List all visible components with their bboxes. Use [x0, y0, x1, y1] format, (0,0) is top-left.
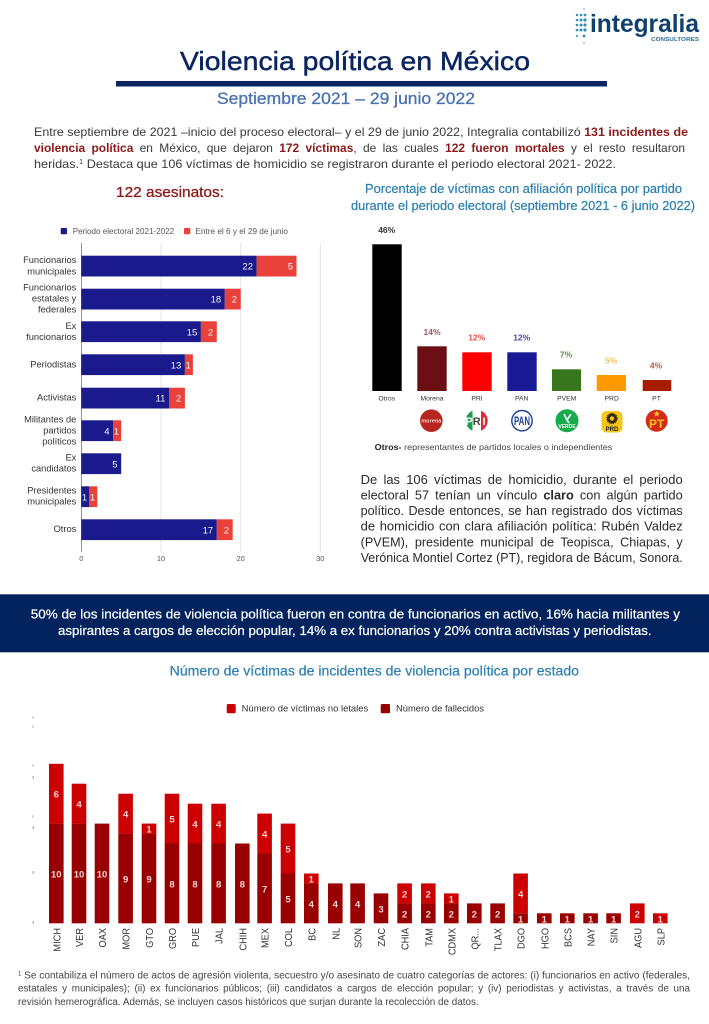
value labels: 2: [402, 909, 407, 920]
paragraph: victims with party link: electoral 57 tenían un vínculo claro con algún partido: [361, 488, 683, 502]
state labels: MICH: [52, 928, 63, 952]
value labels: 1: [186, 360, 191, 371]
category labels: políticos: [42, 437, 77, 447]
value labels: 4: [192, 820, 198, 831]
bar chart: assassinations by category: [23, 226, 324, 563]
state labels: QR...: [470, 928, 481, 950]
value labels: 5: [169, 815, 175, 826]
note: Otros: Otros- representantes de partidos locales o independientes: [375, 442, 612, 452]
value labels: 2: [449, 909, 454, 920]
percentages: 5%: [605, 355, 618, 365]
logo: integralia: [576, 8, 700, 44]
value labels: 2: [635, 909, 640, 920]
value labels: 8: [192, 879, 198, 890]
footnote: estatales y municipales); (ii) ex funcionarios públicos; (iii) candidatos a cargos de elección popular; y (iv) periodistas y activistas, a través de una: [18, 984, 690, 995]
icon: Verde logo: [556, 409, 578, 432]
value labels: 1: [146, 825, 152, 836]
percentages: 14%: [423, 327, 441, 337]
party names: [378, 396, 661, 403]
heading: party affiliation chart: durante el periodo electoral (septiembre 2021 - 6 junio 2022): [351, 199, 695, 213]
value labels: 10: [74, 870, 84, 880]
state labels: DGO: [516, 928, 528, 949]
value labels: 5: [285, 894, 291, 905]
icon: PRD logo: PRD: [606, 427, 619, 433]
category labels: Presidentes: [27, 486, 77, 496]
value labels: 13: [171, 360, 181, 371]
state labels: BCS: [563, 928, 574, 947]
value labels: 1: [588, 914, 594, 925]
state labels: VER: [75, 928, 86, 947]
state labels: NL: [331, 928, 342, 940]
value labels: 2: [426, 889, 431, 900]
value labels: 1: [90, 492, 95, 503]
banner: incident shares: 50% de los incidentes de violencia política fueron en contra de funcionarios en activo, 16% hacia militantes y: [31, 607, 681, 621]
value labels: 5: [288, 262, 293, 273]
state labels: HGO: [540, 928, 551, 949]
percentages: 12%: [513, 333, 531, 343]
value labels: 10: [51, 870, 62, 880]
value labels: 17: [203, 525, 213, 536]
stacked bar chart: victims by state: [32, 704, 668, 955]
icon: PT logo: PT: [649, 417, 665, 431]
value labels: 4: [216, 820, 222, 831]
party names: PRI: [471, 396, 483, 403]
value labels: 4: [309, 899, 315, 910]
percentages: 7%: [560, 349, 573, 359]
value labels: 4: [333, 899, 339, 910]
state labels: NAY: [586, 928, 598, 946]
legend: [227, 704, 485, 714]
state labels: PUE: [191, 928, 202, 947]
logo: integralia: integralia: [590, 10, 700, 38]
axis ticks: [79, 554, 324, 563]
icon: PRD logo: [602, 411, 622, 433]
value labels: 4: [518, 889, 524, 900]
state labels: ZAC: [377, 928, 388, 946]
bars: electoral period: [81, 256, 257, 540]
state labels: GRO: [168, 928, 179, 949]
category labels: Activistas: [37, 393, 77, 403]
heading: victims by state: Número de víctimas de incidentes de violencia política por estado: [170, 664, 579, 679]
value labels: 6: [54, 790, 59, 801]
percentages: 46%: [378, 225, 396, 235]
state labels: JAL: [214, 928, 226, 944]
state labels: OAX: [98, 928, 109, 947]
value labels: 1: [542, 914, 548, 925]
state labels: MOR: [121, 928, 133, 950]
category labels: Otros: [54, 524, 77, 534]
state labels: GTO: [145, 928, 156, 948]
banner: incident shares: aspirantes a cargos de elección popular, 14% a ex funcionarios y 20% contra activistas y periodistas.: [58, 624, 652, 638]
value labels: 2: [472, 909, 477, 920]
percentages: [378, 225, 663, 371]
footnote: [18, 970, 690, 1008]
paragraph: victims with party link: [361, 473, 683, 565]
legend: Número de fallecidos: [396, 704, 485, 714]
paragraph: victims with party link: (PVEM), presidente municipal de Teopisca, Chiapas, y: [361, 535, 683, 549]
value labels: 10: [97, 870, 107, 880]
legend: Número de víctimas no letales: [242, 704, 369, 714]
value labels: 2: [232, 295, 237, 306]
value labels: 4: [262, 830, 268, 840]
value labels: 1: [565, 914, 571, 925]
value labels: 4: [123, 810, 129, 821]
heading: party affiliation chart: Porcentaje de víctimas con afiliación política por partido: [365, 182, 682, 196]
icon: PAN logo: PAN: [514, 416, 530, 428]
value labels: 1: [309, 874, 315, 885]
icon: PRI logo: P: [465, 416, 473, 428]
value labels: 4: [104, 426, 110, 437]
value labels: 2: [495, 909, 500, 920]
axis ticks: 20: [237, 554, 245, 563]
state labels: AGU: [633, 928, 644, 948]
footnote: 1: [18, 971, 22, 977]
state labels: CHIA: [400, 928, 412, 950]
state labels: [52, 928, 667, 955]
value labels: 9: [123, 874, 128, 886]
intro paragraph: heridas.: [34, 157, 77, 171]
value labels: 2: [426, 909, 431, 920]
category labels: Ex: [65, 321, 77, 331]
bar chart: victims by party: [372, 225, 671, 452]
state labels: SON: [353, 928, 365, 948]
category labels: estatales y: [32, 294, 77, 304]
state labels: CHIH: [238, 928, 249, 951]
icon: PRI logo: R: [473, 416, 481, 428]
value labels: 4: [355, 899, 361, 910]
footnote: Se contabiliza el número de actos de agresión violenta, secuestro y/o asesinato de cuatro categorías de actores: (i) funcionarios en activo (federales,: [21, 970, 690, 981]
value labels: 22: [242, 262, 253, 273]
party names: PAN: [515, 396, 529, 403]
bars: [372, 244, 671, 391]
state labels: BC: [307, 928, 318, 941]
intro paragraph: violencia política en México, que dejaron 172 víctimas, de las cuales 122 fueron mortales y el resto resultaron: [34, 141, 685, 155]
value labels: 5: [112, 459, 118, 470]
party names: Otros: [378, 396, 396, 403]
paragraph: victims with party link: político. Desde entonces, se han registrado dos víctimas: [361, 504, 683, 518]
logo: integralia: CONSULTORES: [651, 37, 699, 43]
icon: morena logo: [420, 409, 443, 432]
legend: Entre el 6 y el 29 de junio: [196, 226, 288, 236]
banner: incident shares: [0, 594, 709, 652]
party names: PVEM: [557, 396, 577, 403]
intro paragraph: Entre septiembre de 2021 –inicio del proceso electoral– y el 29 de junio 2022, Integralia contabilizó 131 incidentes de: [34, 125, 688, 139]
category labels: [23, 255, 77, 534]
category labels: Militantes de: [24, 415, 76, 425]
clipped axis marks: [32, 716, 34, 924]
value labels: 1: [611, 914, 617, 925]
axis ticks: 0: [79, 554, 83, 563]
value labels: 18: [211, 295, 221, 306]
party names: PRD: [605, 396, 619, 403]
icon: PRI logo: [465, 410, 488, 432]
category labels: Funcionarios: [23, 255, 77, 265]
icon: PAN logo: [512, 410, 532, 431]
percentages: 4%: [650, 361, 663, 371]
state labels: TLAX: [493, 928, 505, 951]
legend: Periodo electoral 2021-2022: [73, 226, 174, 236]
value labels: 5: [285, 844, 291, 856]
legend: [61, 226, 288, 236]
value labels: 2: [176, 394, 181, 405]
intro paragraph: Destaca que 106 víctimas de homicidio se registraron durante el periodo electoral 2021- 2022.: [83, 157, 616, 171]
category labels: funcionarios: [26, 332, 77, 342]
icon: PRI logo: I: [482, 416, 486, 428]
value labels: 9: [146, 874, 152, 886]
value labels: 1: [449, 894, 455, 905]
bars: 6 to 29 June: [89, 256, 296, 540]
intro paragraph: [34, 125, 688, 171]
icon: Verde logo: VERDE: [558, 424, 576, 430]
footnote: revisión hemerográfica. Además, se incluyen casos históricos que surjan durante la recolección de datos.: [18, 997, 479, 1008]
party names: PT: [652, 396, 661, 403]
bars: non-lethal victims: [49, 764, 668, 923]
state labels: TAM: [424, 928, 435, 947]
title rule: [116, 81, 607, 86]
value labels: [51, 790, 664, 925]
value labels: [82, 262, 293, 536]
heading: 122 asesinatos: 122 asesinatos:: [116, 184, 224, 201]
value labels: 1: [518, 914, 524, 925]
value labels: 2: [224, 525, 229, 536]
party names: Morena: [420, 396, 444, 403]
state labels: SLP: [656, 928, 667, 945]
icon: morena logo: morena: [421, 419, 442, 425]
heading: party affiliation chart: [351, 182, 695, 213]
value labels: 1: [82, 492, 87, 503]
value labels: 4: [76, 800, 82, 811]
percentages: 12%: [468, 333, 486, 343]
value labels: 11: [156, 394, 165, 405]
state labels: CDMX: [447, 928, 458, 955]
icon: PT logo: [646, 410, 668, 432]
value labels: 8: [216, 879, 221, 890]
value labels: 15: [187, 327, 197, 338]
value labels: 2: [402, 889, 407, 900]
state labels: SIN: [609, 928, 621, 943]
category labels: Periodistas: [30, 360, 77, 370]
value labels: 8: [240, 879, 245, 890]
value labels: 2: [208, 327, 213, 338]
value labels: 1: [658, 914, 664, 925]
intro paragraph: 1: [79, 159, 83, 166]
state labels: MEX: [260, 928, 272, 948]
axis ticks: 10: [157, 554, 165, 563]
subtitle: Septiembre 2021 – 29 junio 2022: [217, 90, 475, 108]
value labels: 3: [378, 904, 384, 915]
paragraph: victims with party link: de homicidio con clara afiliación política: Rubén Valdez: [361, 520, 683, 534]
category labels: municipales: [27, 497, 77, 507]
bars: fatalities: [49, 824, 621, 923]
value labels: 8: [169, 879, 175, 890]
category labels: municipales: [27, 266, 77, 276]
value labels: 1: [114, 426, 119, 437]
state labels: COL: [284, 928, 295, 947]
category labels: partidos: [43, 426, 77, 436]
category labels: Ex: [65, 453, 77, 463]
category labels: federales: [38, 305, 77, 315]
axis ticks: 30: [316, 554, 324, 563]
category labels: Funcionarios: [23, 283, 77, 293]
paragraph: victims with party link: Verónica Montiel Cortez (PT), regidora de Bácum, Sonora.: [361, 551, 683, 565]
title: Violencia política en México: [180, 46, 530, 76]
paragraph: victims with party link: De las 106 víctimas de homicidio, durante el periodo: [361, 473, 683, 487]
value labels: 7: [262, 884, 267, 895]
category labels: candidatos: [31, 464, 77, 474]
